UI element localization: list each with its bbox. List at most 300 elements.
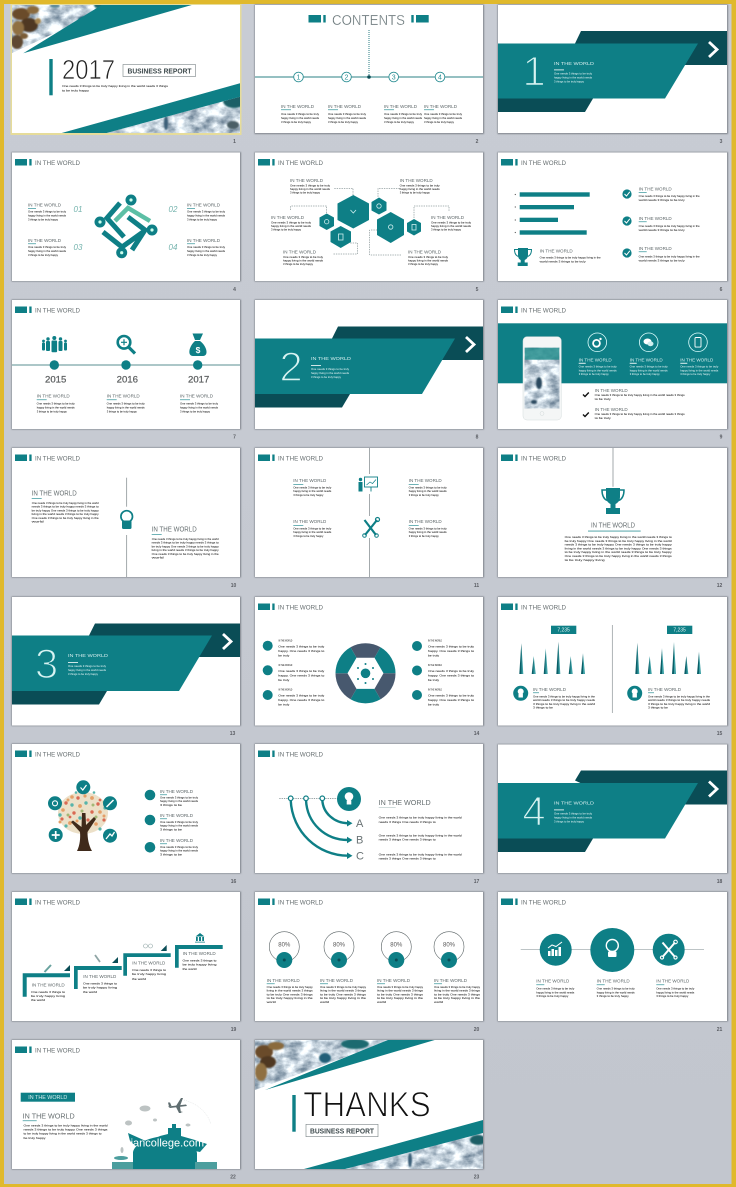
text right (648, 687, 711, 710)
text block left: IN THE WORLD (271, 215, 305, 220)
list item 3: happy living in the world needs (160, 849, 199, 853)
text block top left: happy living in the world needs (290, 187, 331, 191)
list item 1 (145, 789, 199, 807)
slide 2: contents (254, 4, 484, 134)
text 02: 3 things to be truly happy (187, 218, 218, 222)
item 3: IN THE WORLD (278, 688, 292, 692)
value label right (667, 626, 692, 634)
dotted line (279, 797, 338, 799)
trophy text: world needs 3 things to be truly (540, 260, 586, 264)
header (15, 750, 80, 758)
text 1 (536, 978, 575, 998)
text left: One needs 3 things to be truly happy living in the (533, 694, 595, 698)
section text (554, 800, 595, 824)
check item 2: One needs 3 things to be truly happy living in the (639, 224, 700, 228)
left text (32, 491, 99, 524)
years (45, 374, 209, 385)
text block 2: 3 things to be truly happy (328, 120, 359, 124)
ring 2: 80% (333, 942, 346, 948)
text block 1: IN THE WORLD (281, 104, 315, 109)
text top right: happy living in the world needs (409, 489, 447, 493)
section text: One needs 3 things to be truly (554, 812, 593, 816)
text bottom right: IN THE WORLD (409, 519, 442, 524)
text 2017: One needs 3 things to be truly (180, 402, 219, 406)
thanks title: THANKS (303, 1086, 431, 1125)
body text (24, 1124, 108, 1140)
text 2: to be truly happy living in the (320, 996, 367, 1000)
accent bar (292, 1095, 296, 1132)
trophy text: IN THE WORLD (540, 248, 573, 254)
accent bar (49, 59, 53, 95)
text 2016: 3 things to be truly happy (107, 410, 137, 414)
item 4: happy. One needs 3 things to (428, 649, 475, 653)
timeline: 2 (345, 75, 349, 82)
item 5 (412, 663, 475, 682)
item 2 (263, 663, 325, 682)
years: 2016 (117, 374, 138, 385)
left text: be truly happy One needs 3 things to be truly happy (32, 508, 99, 512)
text 2: One needs 3 things to be truly happy (320, 985, 367, 989)
page number 6: 6 (720, 287, 723, 293)
left text: world (32, 520, 44, 524)
slide 17: curved arrows A B C (254, 744, 484, 874)
ring 3 (381, 932, 411, 968)
text block top right (400, 178, 440, 194)
check item 1: One needs 3 things to be truly happy living in the (639, 194, 700, 198)
right text (152, 527, 219, 560)
header: IN THE WORLD (521, 455, 566, 462)
text block bottom right: 3 things to be truly happy (408, 262, 439, 266)
section text: happy living in the world needs (311, 371, 350, 375)
check item 3: world needs 3 things to be truly (639, 258, 685, 262)
slide 9: phone and features (498, 300, 728, 430)
header (15, 898, 80, 906)
page number 3: 3 (720, 139, 723, 145)
step 4: One needs 3 things to (182, 958, 217, 962)
text block right (431, 215, 472, 232)
item 1: happy. One needs 3 things to (278, 649, 325, 653)
slide 8: section 2 (254, 300, 484, 430)
text 2015: 3 things to be truly happy (37, 410, 67, 414)
step 2: the world (83, 990, 98, 994)
text 2016 (107, 394, 145, 414)
timeline line and dots (12, 360, 240, 370)
slide 19: rising steps (12, 892, 241, 1022)
text 3: One needs 3 things to be truly (656, 986, 695, 990)
text 04: One needs 3 things to be truly (187, 245, 226, 249)
item 5: One needs 3 things to be truly (428, 669, 475, 673)
header (501, 159, 566, 167)
text top right (409, 478, 447, 497)
feature text 3: 3 things to be truly happy (680, 372, 711, 376)
item 2: IN THE WORLD (278, 663, 292, 667)
slide 15: spike charts (498, 596, 728, 726)
bottom photo (346, 1133, 483, 1169)
subtitle: to be truly happy (62, 88, 90, 92)
section number: 1 (522, 48, 546, 95)
header: IN THE WORLD (521, 307, 566, 314)
header (501, 898, 566, 906)
curved arrows (291, 800, 348, 856)
section number: 3 (35, 640, 58, 687)
paragraph 1 (379, 816, 462, 824)
section number: 2 (279, 343, 303, 390)
value label left (551, 626, 576, 634)
step numbers (74, 205, 178, 252)
header: IN THE WORLD (278, 751, 323, 758)
paragraph 2: needs 3 things One needs 3 things to (379, 838, 436, 842)
icon: trophy (602, 488, 624, 514)
heading: IN THE WORLD (591, 522, 635, 529)
text block 3 (384, 104, 423, 124)
page number 20: 20 (474, 1027, 479, 1033)
text block bottom right: One needs 3 things to be truly (408, 255, 449, 259)
check item 3: One needs 3 things to be truly happy living in the (639, 254, 700, 258)
text block top left: 3 things to be truly happy (290, 190, 321, 194)
page number 10: 10 (231, 583, 236, 589)
text top right: IN THE WORLD (409, 478, 442, 483)
slide 11: icons with four texts (254, 448, 484, 578)
icon: light bulb (121, 511, 132, 529)
icon: money bag (189, 334, 207, 356)
item 3 (263, 688, 325, 706)
text block bottom left: happy living in the world needs (283, 258, 324, 262)
page number 14: 14 (474, 731, 479, 737)
text left: IN THE WORLD (533, 687, 567, 692)
item 5: happy. One needs 3 things to (428, 674, 475, 678)
text bottom right: One needs 3 things to be truly (409, 526, 447, 530)
step 2: IN THE WORLD (83, 974, 117, 979)
text 1: IN THE WORLD (267, 978, 300, 983)
years: 2017 (188, 374, 209, 385)
text 2: One needs 3 things to be truly (597, 986, 635, 990)
text 3: world (377, 1000, 387, 1004)
text block top left (290, 178, 331, 194)
item 5: be truly (428, 678, 440, 682)
paragraph 2 (379, 833, 462, 842)
paragraph 2: One needs 3 things to be truly happy living in the world (379, 833, 462, 837)
icon: tools (363, 518, 380, 537)
dashed connectors (291, 188, 449, 255)
header: IN THE WORLD (35, 307, 80, 314)
ring 1: 80% (278, 942, 291, 948)
check row 1: IN THE WORLD (595, 388, 628, 393)
text 04: happy living in the world needs (187, 249, 226, 253)
feature text 1: IN THE WORLD (579, 358, 612, 363)
watermark: heritagechristiancollege.com (65, 1138, 204, 1150)
header: IN THE WORLD (278, 160, 323, 167)
text 01: IN THE WORLD (28, 202, 62, 208)
text 03: IN THE WORLD (28, 238, 62, 243)
header (258, 159, 323, 167)
section text (554, 61, 595, 84)
text left: world needs 3 things to be truly happy needs (533, 698, 596, 702)
value label right: 7,235 (673, 628, 686, 634)
page number 9: 9 (720, 434, 723, 440)
letters: A (356, 818, 364, 830)
page number 1: 1 (233, 139, 236, 145)
top photo (12, 5, 102, 53)
text 1: to be truly happy living in the (267, 996, 313, 1000)
text 4: living in the world needs 3 things (434, 989, 481, 993)
text block bottom left: One needs 3 things to be truly (283, 255, 324, 259)
report badge: BUSINESS REPORT (128, 66, 192, 76)
page number 8: 8 (476, 434, 479, 440)
icon right (627, 686, 642, 701)
page number 15: 15 (717, 731, 722, 737)
text right: 3 things to be truly happy living in the world (648, 702, 711, 706)
feature text 2: 3 things to be truly happy (630, 372, 660, 376)
item 1 (263, 638, 325, 658)
item 2: be truly (278, 678, 290, 682)
section text (68, 653, 109, 676)
text 1: world (267, 1000, 276, 1004)
text bottom right: 3 things to be truly happy (409, 534, 439, 538)
header: IN THE WORLD (35, 751, 80, 758)
text right: 3 things to be (648, 706, 669, 710)
text top left: 3 things to be truly happy (293, 493, 324, 497)
text 2017: 3 things to be truly happy (180, 410, 211, 414)
text block bottom right (408, 250, 449, 266)
label box (21, 1093, 75, 1102)
text 2016: happy living in the world needs (107, 406, 145, 410)
slide 18: section 4 (498, 744, 728, 874)
page number 12: 12 (717, 583, 722, 589)
item 3: happy. One needs 3 things to (278, 698, 325, 702)
page number 17: 17 (474, 879, 479, 885)
section text: 3 things to be truly happy (68, 672, 99, 676)
text 04: 3 things to be truly happy (187, 253, 218, 257)
text 2015: One needs 3 things to be truly (37, 402, 75, 406)
text 4: to be truly happy living in the (434, 996, 481, 1000)
text block 1: One needs 3 things to be truly (281, 112, 320, 116)
timeline: 3 (392, 75, 396, 82)
section text: IN THE WORLD (554, 61, 595, 66)
step 3: One needs 3 things to (132, 968, 167, 972)
step 4: IN THE WORLD (183, 951, 216, 956)
paragraph 3: needs 3 things One needs 3 things to (379, 857, 436, 861)
divider (611, 625, 613, 713)
left text: needs 3 things to be truly happy needs 3 things to (32, 505, 99, 509)
body text: needs 3 things to be truly happy One needs 3 things (24, 1128, 108, 1132)
left text: living in the world needs 3 things to be truly happy (32, 512, 99, 516)
text 04: IN THE WORLD (187, 238, 221, 243)
bottom teal wedge (62, 83, 240, 133)
item 4: be truly (428, 654, 440, 658)
step 1: the world (31, 998, 46, 1002)
slide 23: thanks (254, 1039, 486, 1170)
illustration: globe with landmarks (112, 1098, 217, 1169)
text 2: happy living in the world needs (597, 990, 635, 994)
slide 14: wheel with six items (254, 596, 484, 726)
text block left: 3 things to be truly happy (271, 228, 302, 232)
step 2: be truly happy living (83, 986, 118, 990)
item 6: One needs 3 things to be truly (428, 694, 475, 698)
header (15, 159, 80, 167)
text block right: 3 things to be truly happy (431, 228, 462, 232)
letters: C (356, 850, 364, 862)
check item 3 (622, 246, 700, 262)
text block 4: One needs 3 things to be truly (424, 112, 463, 116)
chevron (223, 634, 231, 649)
teal band (498, 323, 727, 383)
header: IN THE WORLD (521, 160, 566, 167)
step 1: IN THE WORLD (32, 982, 65, 988)
text block top right: happy living in the world needs (400, 187, 440, 191)
chevron (466, 337, 474, 352)
text 2016: One needs 3 things to be truly (107, 402, 145, 406)
text 1: to be truly One needs 3 things (267, 992, 313, 996)
page number 18: 18 (717, 879, 722, 885)
icon: tools (653, 934, 685, 966)
bar chart (515, 192, 590, 235)
item 3: One needs 3 things to be truly (278, 694, 325, 698)
left text: One needs 3 things to be truly happy living in the world (32, 501, 99, 505)
list item 3 (145, 838, 199, 856)
page number 4: 4 (233, 287, 236, 293)
text 03 (28, 238, 67, 257)
icon: growth chart (540, 934, 572, 966)
ring 1 (269, 932, 299, 968)
right text: be truly happy One needs 3 things to be truly happy (152, 544, 219, 548)
page number 21: 21 (717, 1027, 722, 1033)
text block 2: happy living in the world needs (328, 116, 367, 120)
text 03: One needs 3 things to be truly (28, 245, 67, 249)
list item 3: One needs 3 things to be truly (160, 845, 199, 849)
section text: One needs 3 things to be truly (311, 367, 350, 371)
top photo (255, 1040, 388, 1090)
vertical line (612, 448, 614, 487)
slide 7: timeline 2015-2017 (12, 300, 241, 430)
text block bottom right: IN THE WORLD (408, 250, 442, 254)
icon: trophy (514, 248, 532, 266)
paragraph 1: One needs 3 things to be truly happy living in the world (379, 816, 462, 820)
check item 1 (622, 186, 700, 202)
section text: IN THE WORLD (554, 800, 595, 806)
list item 1: IN THE WORLD (160, 789, 194, 794)
list item 2: One needs 3 things to be truly (160, 820, 199, 824)
feature text 1: One needs 3 things to be truly (579, 365, 617, 369)
text bottom right: happy living in the world needs (409, 530, 447, 534)
header (15, 306, 80, 314)
text bottom left: IN THE WORLD (293, 519, 327, 524)
text left: 3 things to be (533, 706, 554, 710)
ring 2 (324, 932, 354, 968)
vertical line (368, 448, 370, 577)
item 6: happy. One needs 3 things to (428, 698, 475, 702)
header: IN THE WORLD (35, 1047, 80, 1054)
centered body text: to be truly happy living in the world needs 3 things to be truly happy (565, 550, 672, 554)
text 3 (377, 978, 424, 1004)
section text: One needs 3 things to be truly (554, 72, 593, 76)
text 02 (187, 202, 226, 222)
slide 13: section 3 (12, 596, 241, 726)
item 3: be truly (278, 702, 290, 706)
text block right: IN THE WORLD (431, 215, 465, 220)
wheel chart (336, 643, 396, 703)
header: IN THE WORLD (521, 899, 566, 906)
text block 4: 3 things to be truly happy (424, 120, 455, 124)
header: IN THE WORLD (278, 604, 323, 611)
tree icon circles (48, 780, 117, 843)
text 1: living in the world needs 3 things (267, 989, 313, 993)
text bottom left: happy living in the world needs (293, 530, 332, 534)
right text: One needs 3 things to be truly happy living in the world (152, 537, 219, 541)
years: 2015 (45, 374, 66, 385)
feature text 2: happy living in the world needs (630, 368, 668, 372)
report badge (123, 64, 196, 76)
step numbers: 04 (168, 243, 178, 252)
diamond diagram (94, 194, 158, 258)
text block 4 (424, 104, 463, 124)
step 1: One needs 3 things to (31, 990, 66, 994)
letters (356, 818, 364, 862)
text left: 3 things to be truly happy living in the world (533, 702, 596, 706)
paragraph 3: One needs 3 things to be truly happy living in the world (379, 852, 462, 856)
text block 4: happy living in the world needs (424, 116, 463, 120)
check row 2: IN THE WORLD (595, 407, 628, 412)
centered body text: to be truly happy living (565, 558, 605, 562)
text 2017 (180, 394, 219, 414)
item 4: IN THE WORLD (428, 638, 442, 642)
section text (311, 356, 352, 379)
centered body text (565, 535, 672, 562)
text block 3: happy living in the world needs (384, 116, 423, 120)
text 2017: IN THE WORLD (180, 394, 214, 398)
text 04 (187, 238, 226, 257)
text bottom left: One needs 3 things to be truly (293, 526, 332, 530)
feature icon 2 (639, 333, 658, 352)
section text: happy living in the world needs (554, 76, 593, 80)
step 1: be truly happy living (31, 994, 66, 998)
vertical line (126, 478, 128, 577)
feature text 2: IN THE WORLD (630, 358, 663, 363)
text top left: One needs 3 things to be truly (293, 486, 332, 490)
icon: light bulb (590, 928, 634, 972)
right text: One needs 3 things to be truly happy living in the (152, 552, 219, 556)
slide 6: bars and checks (498, 152, 728, 282)
heading: IN THE WORLD (23, 1113, 75, 1120)
text block bottom left (283, 250, 324, 266)
text 3: happy living in the world needs (656, 990, 695, 994)
text 3: living in the world needs 3 things (377, 989, 424, 993)
step 3: the world (132, 977, 147, 981)
header: IN THE WORLD (35, 899, 80, 906)
text 4: IN THE WORLD (434, 978, 468, 983)
feature text 1: 3 things to be truly happy (579, 372, 609, 376)
check item 2: world needs 3 things to be truly (639, 228, 685, 232)
header (258, 750, 323, 758)
centered body text: living in the world needs 3 things to be truly happy One needs 3 things (565, 546, 672, 550)
step 4: the world (182, 967, 197, 971)
text block left (271, 215, 312, 232)
left text: One needs 3 things to be truly happy living in the (32, 516, 99, 520)
top teal wedge (265, 1040, 435, 1090)
feature text 3: IN THE WORLD (680, 358, 714, 363)
subtitle (62, 84, 169, 92)
list item 2: IN THE WORLD (160, 813, 194, 818)
item 1: IN THE WORLD (278, 638, 292, 642)
text 4: One needs 3 things to be truly happy (434, 985, 481, 989)
text 2015: happy living in the world needs (37, 406, 75, 410)
header (501, 454, 566, 462)
text block 1: 3 things to be truly happy (281, 120, 312, 124)
list item 1: 3 things to be (160, 803, 183, 807)
feature text 3: happy living in the world needs (680, 368, 719, 372)
text right: IN THE WORLD (648, 687, 682, 692)
section number: 4 (522, 788, 546, 834)
text block 3: One needs 3 things to be truly (384, 112, 423, 116)
